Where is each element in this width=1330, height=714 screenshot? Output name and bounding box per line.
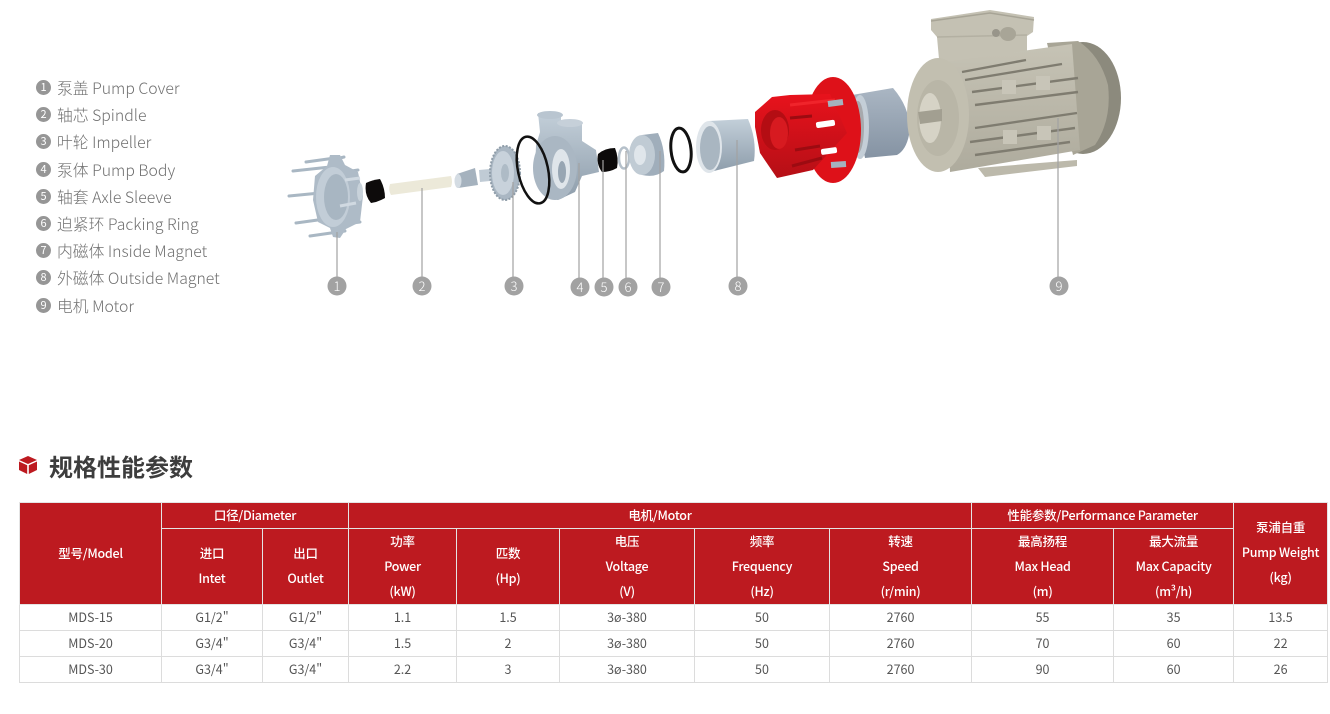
specification table: (m³/h) [1155, 581, 1192, 600]
specification table: 50 [755, 658, 769, 678]
legend item 2: 轴芯 Spindle [57, 103, 146, 126]
callout 4: 4 [577, 277, 584, 296]
legend item 1: 泵盖 Pump Cover [57, 76, 180, 99]
part 8: outside magnet rear [851, 88, 909, 159]
callout 8 [728, 276, 748, 296]
callout 1 [328, 276, 346, 296]
o-ring 2 [669, 127, 693, 173]
specification table: 50 [755, 606, 769, 626]
specification table: (V) [619, 581, 635, 600]
callout 5 [594, 277, 614, 296]
specification table: 2 [505, 632, 511, 652]
specification table: (Hp) [495, 568, 521, 586]
specification table: 55 [1036, 606, 1050, 626]
specification table: MDS-15 [68, 606, 113, 626]
specification table: 2760 [887, 606, 914, 626]
callout 8: 8 [735, 276, 742, 295]
legend item 4: 泵体 Pump Body [57, 158, 175, 181]
specification table: Power [384, 556, 421, 575]
heading: 规格性能参数 [49, 448, 193, 483]
specification table: 2760 [887, 632, 914, 652]
specification table: (r/min) [881, 581, 920, 600]
specification table: 匹数 [496, 542, 520, 562]
legend: part list [36, 76, 220, 317]
specification table: 3ø-380 [607, 632, 647, 652]
legend item 9: 9 [40, 297, 47, 313]
specification table: 功率 [390, 531, 415, 550]
specification table: MDS-20 [68, 632, 113, 652]
legend item 4: 4 [40, 161, 47, 177]
callout 3 [504, 276, 524, 296]
part 2: spindle [389, 176, 452, 195]
specification table: 型号/Model [58, 543, 123, 562]
callout 7: 7 [658, 277, 665, 296]
specification table: Frequency [732, 556, 792, 575]
part 3: impeller [490, 146, 520, 200]
specification table: 3 [505, 658, 511, 678]
specification table: G1/2" [289, 606, 322, 626]
specification table: 进口 [200, 542, 224, 562]
specification table: 电机/Motor [628, 505, 692, 524]
specification table: (Hz) [750, 581, 774, 600]
callout 1: 1 [334, 276, 341, 295]
specification table: Max Head [1014, 556, 1071, 575]
specification table: Speed [882, 556, 919, 575]
specification table: 2760 [887, 658, 914, 678]
legend item 5: 轴套 Axle Sleeve [57, 185, 172, 208]
specification table: G3/4" [195, 658, 229, 678]
part 4: pump body [533, 111, 599, 200]
specification table: 3ø-380 [607, 658, 647, 678]
specification table: 电压 [615, 531, 639, 550]
specification table: G1/2" [195, 606, 229, 626]
specification table: 35 [1167, 606, 1181, 626]
callout 2 [412, 276, 432, 296]
legend item 3: 3 [40, 133, 47, 149]
specification table: 最大流量 [1149, 531, 1198, 550]
specification table: 最高扬程 [1018, 531, 1067, 550]
o-ring 1 [511, 134, 555, 206]
specification table: Intet [198, 568, 226, 586]
specification table: Outlet [287, 568, 324, 586]
legend item 8: 外磁体 Outside Magnet [57, 266, 220, 289]
specification table: 频率 [750, 531, 774, 550]
part 1: seal ring [366, 179, 385, 203]
legend item 2: 2 [40, 106, 47, 122]
specification table: 泵浦自重 [1256, 517, 1305, 536]
legend item 7: 7 [40, 242, 47, 258]
part 5: axle sleeve [598, 148, 618, 172]
legend item 3: 叶轮 Impeller [57, 130, 151, 153]
part 9: motor [907, 10, 1121, 177]
callout 9 [1050, 276, 1068, 296]
legend item 9: 电机 Motor [57, 294, 134, 317]
specification table: Pump Weight [1242, 542, 1319, 561]
specification table: 转速 [888, 531, 913, 550]
specification table: 1.5 [394, 632, 411, 652]
specification table: (kW) [389, 581, 416, 600]
specification table: 性能参数/Performance Parameter [1007, 505, 1198, 524]
specification table [19, 502, 1328, 683]
part 8: red bracket [755, 77, 861, 183]
callout 6 [618, 277, 638, 296]
specification table: (m) [1033, 581, 1053, 600]
callout 5: 5 [601, 277, 608, 296]
exploded pump diagram [288, 10, 1121, 296]
specification table: 90 [1036, 658, 1050, 678]
specification table: 2.2 [394, 658, 411, 678]
specification table: G3/4" [289, 632, 322, 652]
callout 4 [570, 277, 590, 296]
specification table: 50 [755, 632, 769, 652]
callout 2: 2 [419, 276, 426, 295]
callout 7 [652, 277, 670, 296]
callout 3: 3 [511, 276, 518, 295]
legend item 8: 8 [40, 269, 47, 285]
specification table: 60 [1167, 658, 1181, 678]
specification table: 出口 [293, 542, 318, 562]
callout 9: 9 [1056, 276, 1063, 295]
part 7: inside magnet [629, 133, 664, 176]
legend item 6: 迫紧环 Packing Ring [57, 212, 199, 235]
icon: red cube [19, 456, 37, 474]
specification table: G3/4" [289, 658, 322, 678]
part 7: can [696, 119, 755, 173]
specification table: Voltage [606, 556, 648, 575]
part 2: bushing [454, 168, 490, 188]
specification table: 1.1 [394, 606, 411, 626]
specification table: Max Capacity [1136, 556, 1212, 575]
specification table: 口径/Diameter [214, 505, 296, 524]
legend item 5: 5 [40, 188, 47, 204]
callout numbers [328, 276, 1068, 296]
legend item 1: 1 [40, 79, 47, 95]
specification table: 1.5 [499, 606, 517, 626]
specification table: 13.5 [1268, 606, 1293, 626]
specification table: 3ø-380 [607, 606, 647, 626]
specification table: (kg) [1269, 567, 1292, 586]
part 6: packing ring [619, 148, 629, 168]
specification table: 60 [1167, 632, 1181, 652]
specification table: 70 [1036, 632, 1050, 652]
part 1: pump cover [289, 155, 363, 238]
legend item 7: 内磁体 Inside Magnet [57, 239, 207, 262]
leader lines [337, 118, 1058, 278]
specification table: 22 [1274, 632, 1288, 652]
specification table: 26 [1274, 658, 1288, 678]
callout 6: 6 [625, 277, 632, 296]
specification table: MDS-30 [68, 658, 113, 678]
legend item 6: 6 [40, 215, 47, 231]
specification table: G3/4" [195, 632, 229, 652]
